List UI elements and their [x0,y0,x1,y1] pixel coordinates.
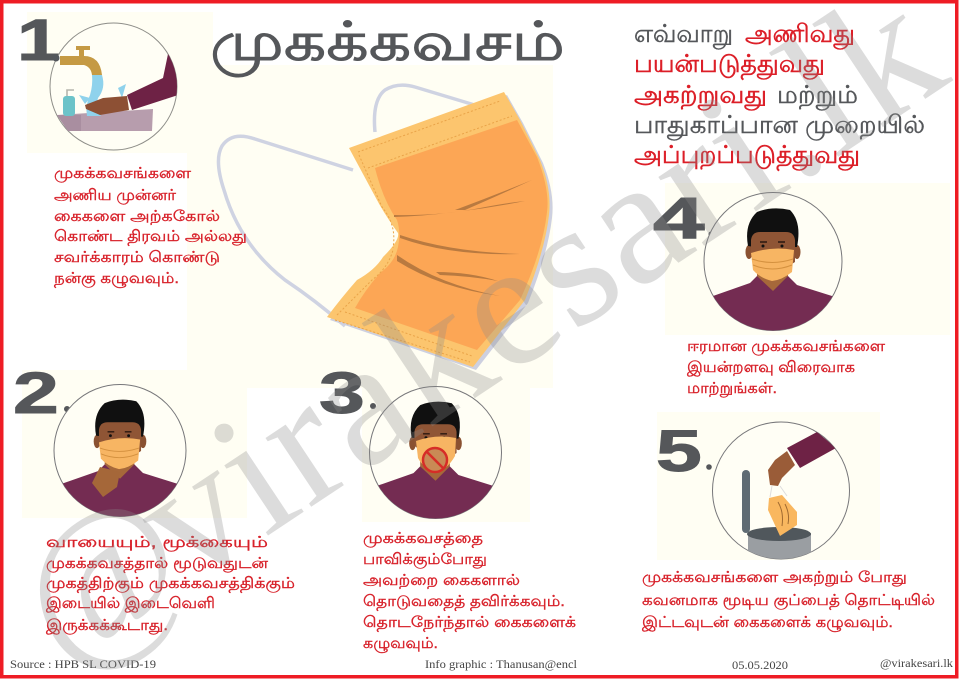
heading: how to wear, use, remove and dispose: மற்றும் [777,81,858,111]
step 2 text: முகத்திற்கும் முகக்கவசத்திக்கும் [46,575,295,593]
step 5 text [642,569,935,632]
step 1 text: முகக்கவசங்களை [54,165,192,182]
step 3 text [363,530,576,653]
step 2 text: வாயையும், மூக்கையும் [46,534,268,551]
step 4 text: இயன்றளவு விரைவாக [687,359,855,376]
footer credits: 05.05.2020 [732,658,788,672]
step 3 text: தொடநேர்ந்தால் கைகளைக் [363,614,576,631]
step 2 text: இருக்கக்கூடாது. [46,617,168,634]
footer credits: @virakesari.lk [880,656,953,670]
step 3 circle: do not touch mask [369,386,502,519]
step 4 text [687,338,886,397]
step 2 text [46,534,295,634]
footer credits: Source : HPB SL COVID-19 [10,657,156,671]
heading: how to wear, use, remove and dispose: பயன்படுத்துவது [634,50,825,80]
step 1 text: நன்கு கழுவவும். [54,270,179,288]
cream backing panels [22,12,950,560]
footer credits [10,656,953,672]
heading: how to wear, use, remove and dispose: அணிவது [745,20,855,50]
step 3 text: பாவிக்கும்போது [363,551,487,569]
step 4 circle: person wearing mask [704,192,842,331]
step 1 text: அணிய முன்னர் [54,187,176,204]
step 5 dot [706,464,712,470]
step 5 circle: disposing mask in bin [712,422,850,563]
heading: how to wear, use, remove and dispose: அகற்றுவது [634,81,767,111]
heading: how to wear, use, remove and dispose: எவ்வாறு [634,20,733,50]
footer credits: Info graphic : Thanusan@encl [425,657,578,671]
step 1 text: கொண்ட திரவம் அல்லது [54,228,247,245]
step 1 circle: washing hands [50,23,178,150]
step 3 text: முகக்கவசத்தை [363,530,483,547]
step 2 text: முகக்கவசத்தால் மூடுவதுடன் [46,555,269,572]
heading: how to wear, use, remove and dispose: அப்புறப்படுத்துவது [634,141,860,171]
step 3 text: தொடுவதைத் தவிர்க்கவும். [363,593,565,610]
step 4 dot [708,232,714,236]
title: முகக்கவசம் [210,12,565,77]
heading: how to wear, use, remove and dispose: பாதுகாப்பான முறையில் [634,111,925,141]
step 5 text: கவனமாக மூடிய குப்பைத் தொட்டியில் [642,592,935,610]
step 3 text: கழுவவும். [363,635,438,653]
step 5 number: 5 [656,420,702,484]
step 5 text: இட்டவுடன் கைகளைக் கழுவவும். [642,614,893,632]
heading: how to wear, use, remove and dispose [634,20,925,171]
step 2 text: இடையில் இடைவெளி [46,595,215,612]
step 4 number: 4 [653,186,705,251]
step 1 number: 1 [17,8,61,73]
step 3 text: அவற்றை கைகளால் [363,572,520,589]
step 5 text: முகக்கவசங்களை அகற்றும் போது [642,569,907,586]
central mask illustration [218,85,553,370]
step 4 text: மாற்றுங்கள். [687,380,777,397]
step 3 dot [370,403,376,409]
step 3 number: 3 [319,362,365,426]
step 4 text: ஈரமான முகக்கவசங்களை [687,338,886,355]
step 2 circle: person adjusting mask [54,384,186,517]
step 1 text: கைகளை அற்ககோல் [54,208,220,225]
step 1 text: சவர்க்காரம் கொண்டு [54,249,220,266]
step 1 text [54,165,247,288]
step 2 number: 2 [13,362,59,426]
step 2 dot [64,406,70,412]
